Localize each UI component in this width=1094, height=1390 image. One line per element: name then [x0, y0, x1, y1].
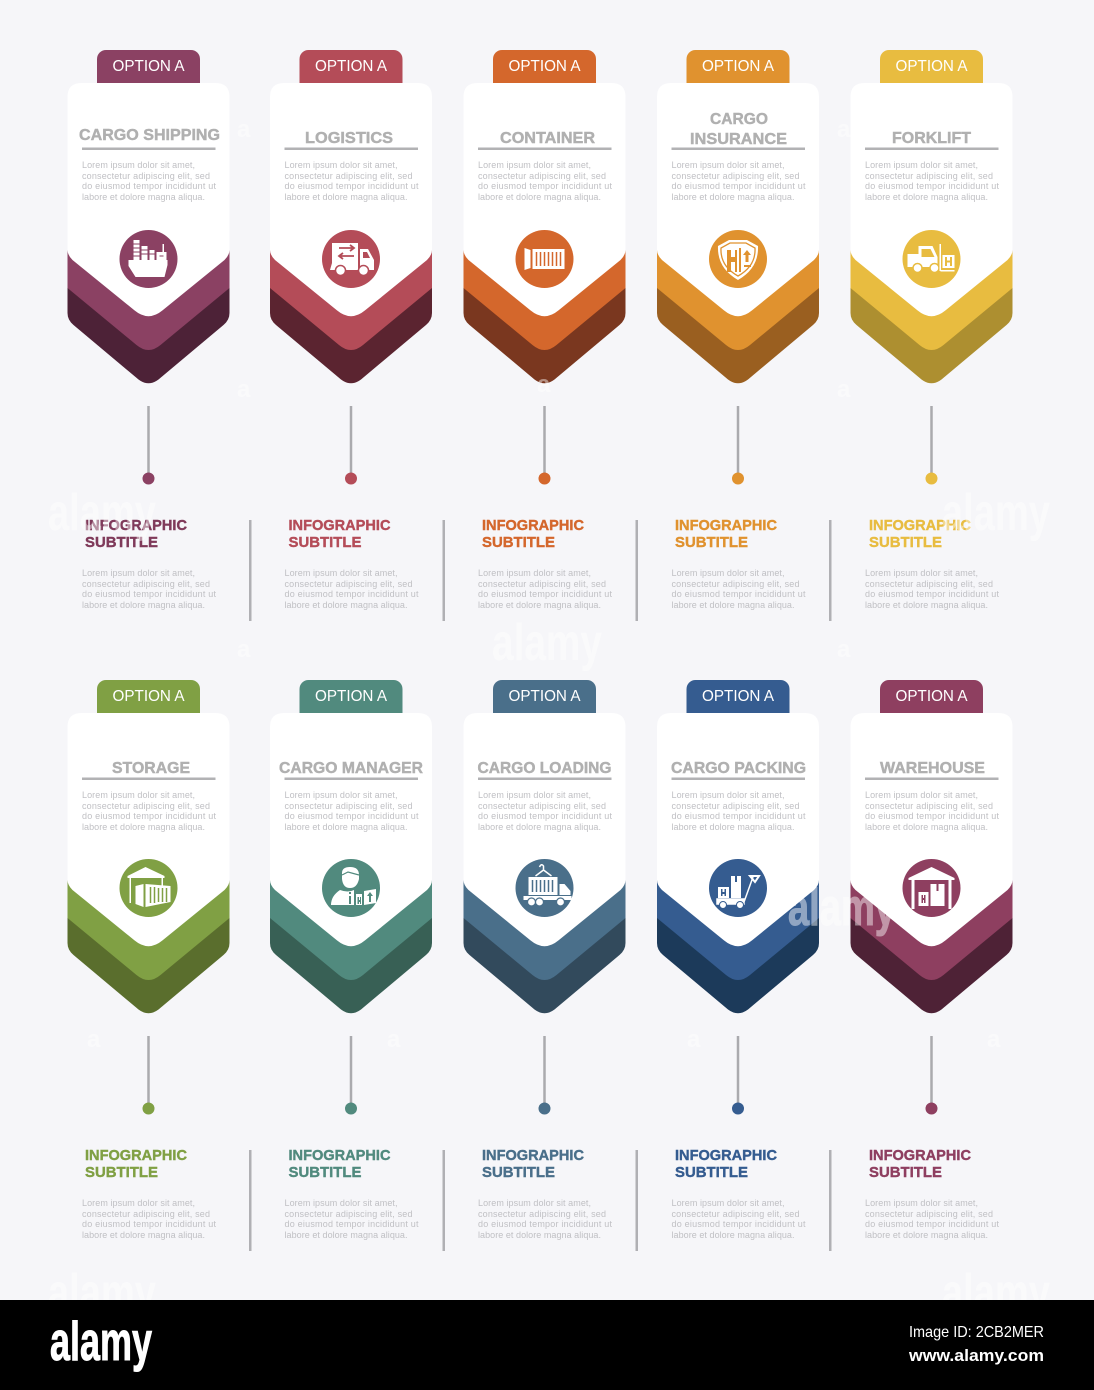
card text: do eiusmod tempor incididunt ut — [478, 811, 612, 821]
card title: LOGISTICS — [305, 130, 393, 147]
card text: Lorem ipsum dolor sit amet, — [82, 790, 195, 800]
connector and dot — [538, 406, 550, 484]
option tab — [97, 680, 200, 713]
lower text: do eiusmod tempor incididunt ut — [865, 1219, 999, 1229]
footer logo: alamy — [50, 1310, 152, 1372]
option tab — [300, 50, 402, 83]
lower text: Lorem ipsum dolor sit amet, — [672, 1198, 784, 1208]
lower text: do eiusmod tempor incididunt ut — [865, 589, 999, 599]
connector and dot — [732, 1036, 744, 1114]
column 3: container — [464, 50, 626, 610]
card text: do eiusmod tempor incididunt ut — [82, 181, 216, 191]
option tab: OPTION A — [315, 58, 387, 75]
card title: WAREHOUSE — [880, 760, 985, 777]
watermarks: alamy — [492, 614, 602, 672]
option tab — [493, 680, 596, 713]
icon: container loading truck — [516, 859, 574, 917]
lower text: labore et dolore magna aliqua. — [478, 600, 601, 610]
lower text: consectetur adipiscing elit, sed — [478, 1209, 606, 1219]
card title: INSURANCE — [690, 131, 787, 148]
card text: labore et dolore magna aliqua. — [672, 822, 794, 832]
connector and dot — [345, 1036, 357, 1114]
option tab: OPTION A — [315, 688, 387, 705]
connector and dot — [926, 1036, 938, 1114]
card text: labore et dolore magna aliqua. — [82, 822, 205, 832]
card text: labore et dolore magna aliqua. — [478, 192, 601, 202]
option tab — [880, 50, 983, 83]
icon: shipping container — [516, 230, 574, 288]
chevron card — [657, 83, 819, 383]
website: www.alamy.com — [908, 1346, 1044, 1365]
option tab — [686, 680, 790, 713]
lower text: Lorem ipsum dolor sit amet, — [478, 1198, 591, 1208]
lower text: Lorem ipsum dolor sit amet, — [478, 568, 591, 578]
option tab: OPTION A — [702, 58, 774, 75]
card text: labore et dolore magna aliqua. — [478, 822, 601, 832]
lower text: do eiusmod tempor incididunt ut — [478, 589, 612, 599]
watermarks: a — [537, 371, 551, 398]
option tab: OPTION A — [112, 688, 185, 705]
card text: do eiusmod tempor incididunt ut — [284, 811, 419, 821]
chevron card — [850, 713, 1012, 1013]
subtitle: SUBTITLE — [288, 1164, 362, 1181]
card text: labore et dolore magna aliqua. — [284, 192, 408, 202]
column 6: storage — [68, 680, 230, 1240]
card text: do eiusmod tempor incididunt ut — [865, 811, 999, 821]
watermarks: a — [237, 636, 251, 663]
chevron card — [270, 713, 432, 1013]
column 4: cargo insurance — [657, 50, 819, 610]
column 5: forklift — [850, 50, 1012, 610]
card text: labore et dolore magna aliqua. — [672, 192, 794, 202]
card title: FORKLIFT — [892, 130, 971, 147]
lower text: do eiusmod tempor incididunt ut — [82, 1219, 216, 1229]
card title: CARGO SHIPPING — [79, 127, 220, 144]
card title: STORAGE — [112, 760, 190, 777]
subtitle: SUBTITLE — [482, 534, 555, 551]
card text: Lorem ipsum dolor sit amet, — [82, 160, 195, 170]
chevron card — [464, 83, 626, 383]
card text: do eiusmod tempor incididunt ut — [672, 811, 806, 821]
subtitle: INFOGRAPHIC — [85, 1147, 187, 1164]
card text: do eiusmod tempor incididunt ut — [478, 181, 612, 191]
lower text: Lorem ipsum dolor sit amet, — [672, 568, 784, 578]
watermarks: a — [387, 1026, 401, 1053]
card text: consectetur adipiscing elit, sed — [672, 171, 800, 181]
lower text: Lorem ipsum dolor sit amet, — [82, 1198, 195, 1208]
card text: consectetur adipiscing elit, sed — [82, 801, 210, 811]
chevron card — [464, 713, 626, 1013]
lower text: Lorem ipsum dolor sit amet, — [82, 568, 195, 578]
watermarks: a — [837, 116, 851, 143]
option tab: OPTION A — [896, 58, 968, 75]
connector and dot — [142, 406, 154, 484]
card text: consectetur adipiscing elit, sed — [478, 171, 606, 181]
card text: do eiusmod tempor incididunt ut — [82, 811, 216, 821]
watermarks: alamy — [788, 879, 896, 937]
card title: CARGO LOADING — [478, 760, 612, 777]
lower text: consectetur adipiscing elit, sed — [865, 1209, 993, 1219]
lower text: do eiusmod tempor incididunt ut — [284, 1219, 419, 1229]
chevron card — [68, 713, 230, 1013]
lower text: Lorem ipsum dolor sit amet, — [865, 568, 978, 578]
card text: consectetur adipiscing elit, sed — [284, 171, 412, 181]
card text: consectetur adipiscing elit, sed — [478, 801, 606, 811]
lower text: do eiusmod tempor incididunt ut — [672, 1219, 806, 1229]
lower text: labore et dolore magna aliqua. — [865, 1230, 988, 1240]
watermarks: a — [687, 1026, 701, 1053]
card text: do eiusmod tempor incididunt ut — [672, 181, 806, 191]
lower text: labore et dolore magna aliqua. — [478, 1230, 601, 1240]
lower text: consectetur adipiscing elit, sed — [478, 579, 606, 589]
card text: Lorem ipsum dolor sit amet, — [672, 160, 784, 170]
card title: CARGO MANAGER — [279, 760, 423, 777]
subtitle: SUBTITLE — [85, 534, 158, 551]
option tab — [686, 50, 790, 83]
subtitle: SUBTITLE — [482, 1164, 555, 1181]
lower text: consectetur adipiscing elit, sed — [672, 579, 800, 589]
card text: Lorem ipsum dolor sit amet, — [672, 790, 784, 800]
lower text: Lorem ipsum dolor sit amet, — [865, 1198, 978, 1208]
card text: Lorem ipsum dolor sit amet, — [865, 790, 978, 800]
lower text: consectetur adipiscing elit, sed — [284, 579, 412, 589]
subtitle: SUBTITLE — [675, 1164, 748, 1181]
watermarks: a — [837, 376, 851, 403]
watermarks: alamy — [942, 1264, 1050, 1322]
lower text: labore et dolore magna aliqua. — [284, 1230, 408, 1240]
lower text: labore et dolore magna aliqua. — [82, 600, 205, 610]
chevron card — [657, 713, 819, 1013]
column 8: cargo loading — [464, 680, 626, 1240]
lower text: consectetur adipiscing elit, sed — [672, 1209, 800, 1219]
card text: labore et dolore magna aliqua. — [82, 192, 205, 202]
column 9: cargo packing — [657, 680, 819, 1240]
watermarks: a — [987, 1026, 1001, 1053]
icon: hand cart with boxes — [709, 859, 767, 917]
lower text: labore et dolore magna aliqua. — [82, 1230, 205, 1240]
subtitle: INFOGRAPHIC — [869, 1147, 971, 1164]
icon: delivery truck — [322, 230, 380, 288]
column 2: logistics — [270, 50, 432, 610]
subtitle: INFOGRAPHIC — [288, 1147, 391, 1164]
icon: cargo manager — [322, 859, 380, 917]
option tab: OPTION A — [112, 58, 185, 75]
option tab — [493, 50, 596, 83]
card text: consectetur adipiscing elit, sed — [82, 171, 210, 181]
connector and dot — [142, 1036, 154, 1114]
option tab: OPTION A — [508, 58, 581, 75]
icon: shield with boxes — [709, 230, 767, 288]
connector and dot — [926, 406, 938, 484]
card text: Lorem ipsum dolor sit amet, — [284, 790, 398, 800]
card text: consectetur adipiscing elit, sed — [672, 801, 800, 811]
subtitle: SUBTITLE — [288, 534, 362, 551]
card text: Lorem ipsum dolor sit amet, — [478, 790, 591, 800]
connector and dot — [732, 406, 744, 484]
card title: CONTAINER — [500, 130, 595, 147]
subtitle: SUBTITLE — [869, 1164, 942, 1181]
option tab: OPTION A — [508, 688, 581, 705]
column 10: warehouse — [850, 680, 1012, 1240]
watermarks: alamy — [48, 1264, 156, 1322]
chevron card — [850, 83, 1012, 383]
option tab — [97, 50, 200, 83]
column 7: cargo manager — [270, 680, 432, 1240]
connector and dot — [538, 1036, 550, 1114]
card text: Lorem ipsum dolor sit amet, — [865, 160, 978, 170]
card text: labore et dolore magna aliqua. — [865, 192, 988, 202]
subtitle: INFOGRAPHIC — [869, 517, 971, 534]
lower text: do eiusmod tempor incididunt ut — [284, 589, 419, 599]
subtitle: INFOGRAPHIC — [482, 1147, 584, 1164]
card text: labore et dolore magna aliqua. — [284, 822, 408, 832]
icon: storage shed with container — [120, 859, 178, 917]
lower text: labore et dolore magna aliqua. — [865, 600, 988, 610]
lower text: do eiusmod tempor incididunt ut — [82, 589, 216, 599]
subtitle: SUBTITLE — [675, 534, 748, 551]
option tab — [300, 680, 402, 713]
card title: CARGO — [710, 111, 768, 128]
lower text: consectetur adipiscing elit, sed — [865, 579, 993, 589]
card text: Lorem ipsum dolor sit amet, — [478, 160, 591, 170]
watermarks: a — [237, 376, 251, 403]
card text: do eiusmod tempor incididunt ut — [284, 181, 419, 191]
lower text: labore et dolore magna aliqua. — [284, 600, 408, 610]
subtitle: INFOGRAPHIC — [85, 517, 187, 534]
card text: consectetur adipiscing elit, sed — [284, 801, 412, 811]
lower text: do eiusmod tempor incididunt ut — [672, 589, 806, 599]
icon: forklift — [902, 230, 960, 288]
subtitle: INFOGRAPHIC — [482, 517, 584, 534]
subtitle: SUBTITLE — [869, 534, 942, 551]
connector and dot — [345, 406, 357, 484]
image id: Image ID: 2CB2MER — [909, 1324, 1044, 1341]
watermarks: alamy — [48, 484, 156, 542]
footer bar — [0, 1300, 1094, 1390]
column 1: cargo shipping — [68, 50, 230, 610]
option tab: OPTION A — [702, 688, 774, 705]
subtitle: INFOGRAPHIC — [288, 517, 391, 534]
lower text: Lorem ipsum dolor sit amet, — [284, 568, 398, 578]
subtitle: INFOGRAPHIC — [675, 517, 777, 534]
watermarks: a — [837, 636, 851, 663]
icon: cargo ship — [120, 230, 178, 288]
lower text: labore et dolore magna aliqua. — [672, 600, 794, 610]
card title: CARGO PACKING — [671, 760, 806, 777]
card text: labore et dolore magna aliqua. — [865, 822, 988, 832]
chevron card — [270, 83, 432, 383]
subtitle: INFOGRAPHIC — [675, 1147, 777, 1164]
subtitle: SUBTITLE — [85, 1164, 158, 1181]
chevron card — [68, 83, 230, 383]
card text: consectetur adipiscing elit, sed — [865, 801, 993, 811]
lower text: consectetur adipiscing elit, sed — [82, 1209, 210, 1219]
card text: consectetur adipiscing elit, sed — [865, 171, 993, 181]
lower text: consectetur adipiscing elit, sed — [82, 579, 210, 589]
lower text: labore et dolore magna aliqua. — [672, 1230, 794, 1240]
watermarks: alamy — [942, 484, 1050, 542]
card text: Lorem ipsum dolor sit amet, — [284, 160, 398, 170]
option tab — [880, 680, 983, 713]
watermarks — [48, 116, 1050, 1322]
watermarks: a — [237, 116, 251, 143]
option tab: OPTION A — [896, 688, 968, 705]
card text: do eiusmod tempor incididunt ut — [865, 181, 999, 191]
watermarks: a — [87, 1026, 101, 1053]
lower text: do eiusmod tempor incididunt ut — [478, 1219, 612, 1229]
lower text: consectetur adipiscing elit, sed — [284, 1209, 412, 1219]
icon: warehouse with boxes — [902, 859, 960, 917]
lower text: Lorem ipsum dolor sit amet, — [284, 1198, 398, 1208]
